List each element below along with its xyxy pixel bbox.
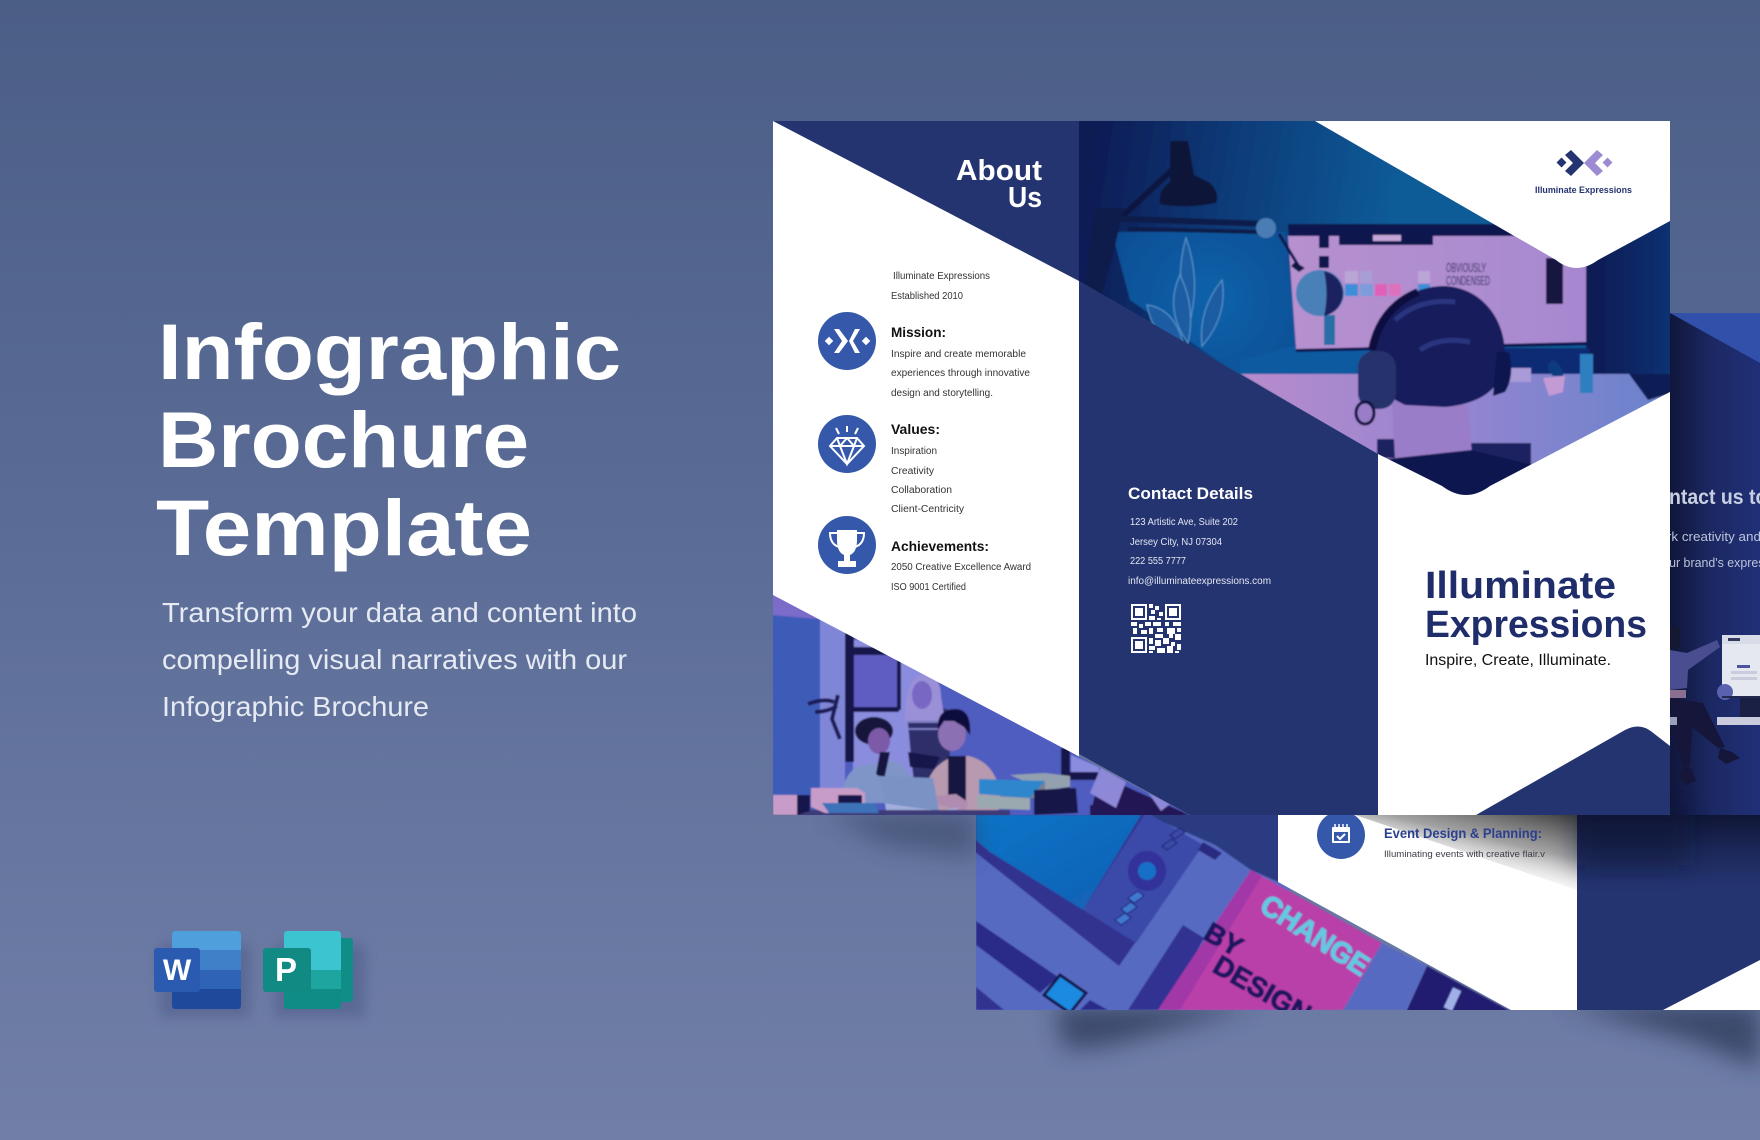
values: Creativity [891,466,934,477]
values [891,421,964,515]
illustration: person at monitor [1670,627,1760,785]
plant [1147,238,1223,351]
text: company name: Established 2010 [891,291,963,302]
monitor: OBVIOUSLY [1446,260,1486,275]
window [808,632,901,762]
monitor: CONDENSED [1446,273,1490,288]
back panel: desk photo: BY [1199,916,1248,963]
icon: calendar [1317,811,1365,859]
people [842,675,1001,816]
icon: Microsoft Word [154,931,250,1017]
person [1356,286,1534,500]
values: Inspiration [891,446,937,457]
text: contact info: 123 Artistic Ave, Suite 202 [1130,517,1238,528]
heading: contact details: Contact Details [1128,485,1253,503]
monitor [1279,224,1600,352]
icon: Microsoft Word: W [163,954,192,987]
photo: designer at monitor [1075,115,1675,505]
panel: about us [773,121,1079,815]
text: contact info: 222 555 7777 [1130,556,1186,567]
text: logo name: Illuminate Expressions [1535,185,1632,196]
laptop [878,776,939,811]
heading: about us: Us [1008,182,1042,214]
values: Collaboration [891,485,952,496]
panel: logo [1315,121,1670,268]
icon: QR code [1131,604,1181,653]
photo: team at table [770,590,1195,820]
icon: Microsoft Publisher: P [275,951,297,988]
values: Values: [891,421,940,437]
back panel: desk photo: DESIGN [1208,949,1316,1030]
fragments on right [1090,767,1190,816]
heading: company name: Expressions [1425,604,1647,646]
tagline: Inspire, Create, Illuminate. [1425,652,1611,669]
back panel: contact us [1670,313,1760,815]
shadow under front brochure [825,812,976,858]
title: Template [156,483,532,572]
text: company name: Illuminate Expressions [893,271,990,282]
title: Infographic [158,307,621,396]
mission: Inspire and create memorable [891,349,1026,360]
heading: company name: Illuminate [1425,565,1616,607]
back panel: services [1278,811,1577,1010]
title [156,307,621,572]
mission [891,324,1030,399]
panel: cover [1378,392,1670,815]
subtitle: Transform your data and content into [162,597,637,628]
text: contact info [1128,517,1271,587]
icon: Microsoft Publisher [263,931,365,1017]
heading: about us: About [956,155,1042,187]
text: contact info: Jersey City, NJ 07304 [1130,537,1222,548]
achievements: 2050 Creative Excellence Award [891,562,1031,573]
book title text: CHANGE [1254,889,1375,983]
icon: logo mark [1557,150,1612,176]
mission: experiences through innovative [891,368,1030,379]
desk [1240,352,1670,465]
lamp [1084,141,1276,294]
title: Brochure [158,395,529,484]
achievements: ISO 9001 Certified [891,582,966,593]
back panel: desk photo [976,815,1510,1010]
mission: Mission: [891,324,946,340]
subtitle: Infographic Brochure [162,691,429,722]
subtitle: compelling visual narratives with our [162,644,627,675]
panel: contact details [1079,281,1378,815]
shadow under back brochure [1055,1004,1760,1068]
heading: event design: Event Design & Planning: [1384,825,1542,841]
right wall window [1060,748,1099,790]
heading: company name [1425,565,1647,646]
subtitle [162,597,637,722]
back brochure [970,313,1760,1030]
text: contact info: info@illuminateexpressions.com [1128,576,1271,587]
achievements: Achievements: [891,538,989,554]
text: event description: Illuminating events with creative flair.v [1384,849,1545,860]
front brochure [770,115,1675,820]
icon: trophy [818,516,876,574]
values: Client-Centricity [891,504,964,515]
shape: bottom navy corner [1476,726,1670,815]
text: company name [891,271,990,302]
heading: about us [956,155,1042,214]
back panel: navy corner [1577,815,1760,1010]
mission: design and storytelling. [891,388,993,399]
achievements [891,538,1031,593]
icon: diamond [818,415,876,473]
icon: brand mark [818,312,876,370]
boxes [773,773,1078,815]
